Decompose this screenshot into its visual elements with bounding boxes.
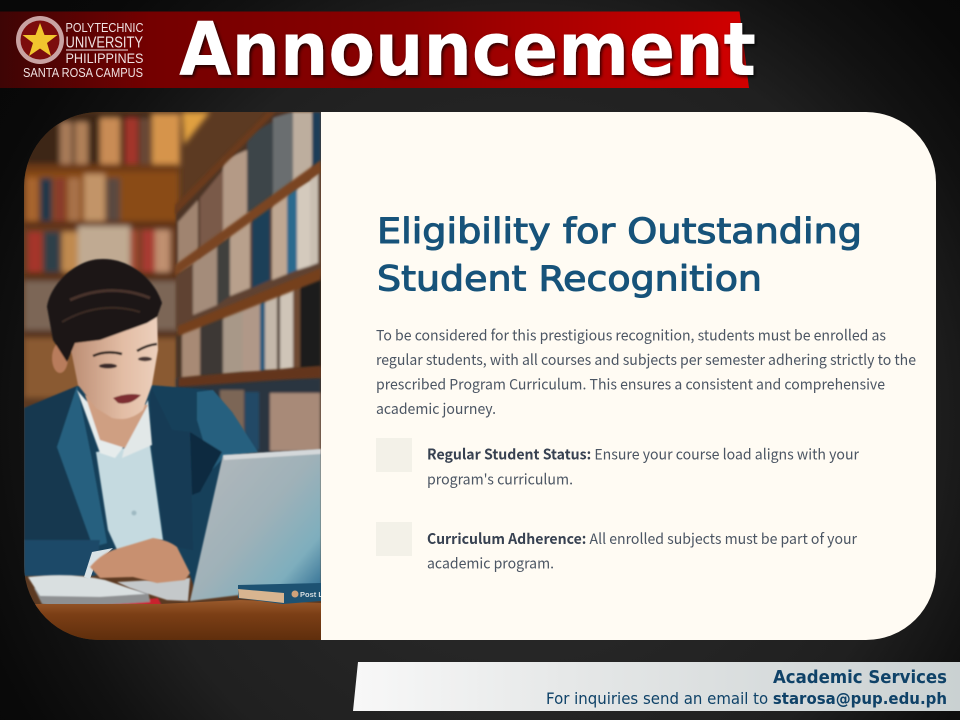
- university logo: PHILIPPINES: [66, 50, 144, 66]
- intro paragraph: [376, 324, 916, 419]
- heading: [377, 212, 862, 300]
- item: regular student status: program's curriculum.: [427, 468, 573, 490]
- laptop base: [117, 578, 190, 601]
- item: curriculum adherence: academic program.: [427, 552, 554, 574]
- title: Announcement: Announcement: [179, 7, 756, 93]
- university logo: POLYTECHNIC: [66, 21, 144, 35]
- footer contact bar: [353, 662, 960, 711]
- university logo: [16, 16, 144, 80]
- item: curriculum adherence: Curriculum Adherence: All enrolled subjects must be part of your: [427, 528, 857, 549]
- item: regular student status: [376, 438, 859, 490]
- shirt cuff: [84, 548, 113, 579]
- open notebook: [28, 575, 146, 597]
- item: regular student status: Regular Student Status: Ensure your course load aligns with your: [427, 444, 859, 464]
- heading: Eligibility for Outstanding: [377, 212, 862, 252]
- jacket: [24, 385, 258, 590]
- laptop screen: [190, 449, 321, 601]
- university logo: UNIVERSITY: [66, 34, 143, 52]
- intro paragraph: academic journey.: [376, 398, 496, 419]
- item: curriculum adherence: [376, 522, 857, 574]
- intro paragraph: To be considered for this prestigious recognition, students must be enrolled as: [376, 324, 886, 346]
- hand: [90, 538, 190, 583]
- open book and red folder: [34, 588, 162, 604]
- intro paragraph: regular students, with all courses and subjects per semester adhering strictly to the: [376, 349, 916, 370]
- footer contact bar: Academic Services: [773, 667, 947, 688]
- stacked blue book: Post L: [300, 590, 323, 599]
- intro paragraph: prescribed Program Curriculum. This ensures a consistent and comprehensive: [376, 374, 885, 394]
- desk: [24, 600, 321, 640]
- shirt: [77, 390, 163, 552]
- photo: student with laptop in library: [24, 112, 323, 640]
- university logo: SANTA ROSA CAMPUS: [23, 66, 143, 80]
- footer contact bar: For inquiries send an email to starosa@pup.edu.ph: [546, 689, 947, 708]
- panel: eligibility content: [321, 112, 936, 640]
- wooden shelf boards: [175, 112, 321, 387]
- heading: Student Recognition: [377, 260, 762, 300]
- header banner: [0, 7, 756, 93]
- stacked blue book: [238, 583, 323, 604]
- face and hair: [47, 259, 162, 419]
